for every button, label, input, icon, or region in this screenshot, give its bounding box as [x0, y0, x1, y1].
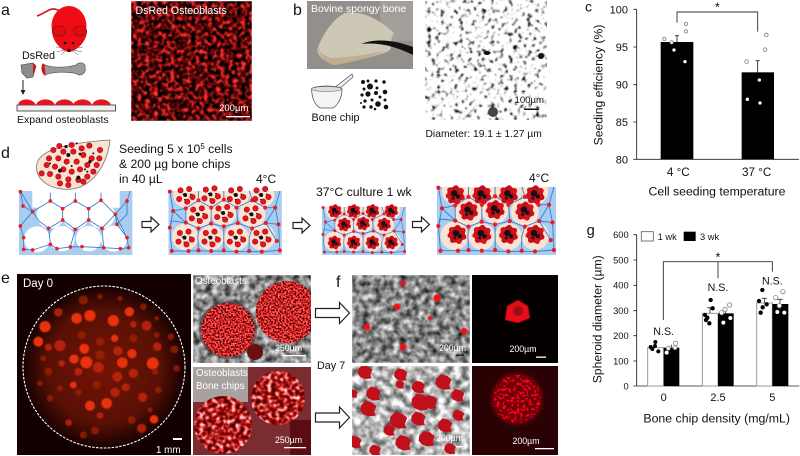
y tick labels — [610, 4, 628, 166]
N.S. labels: N.S. — [708, 282, 728, 294]
y tick labels: 100 — [613, 356, 629, 366]
image: single spheroid bottom — [472, 366, 558, 455]
N.S. labels — [653, 276, 783, 338]
y tick labels: 500 — [613, 255, 629, 265]
label b: b — [293, 2, 302, 19]
arrow 3 — [412, 217, 430, 232]
text: Day 7: Day 7 — [317, 360, 345, 372]
N.S. labels: N.S. — [762, 276, 783, 288]
icon: bone chips — [360, 79, 388, 110]
text: diameter: Diameter: 19.1 ± 1.27 µm — [426, 129, 542, 140]
image: single spheroid top — [472, 275, 558, 363]
image: bone chip micrograph — [425, 0, 547, 120]
significance bracket: * — [716, 250, 721, 264]
image: osteoblasts: 250µm — [275, 343, 302, 353]
icon: expanded osteoblasts on dish — [17, 99, 116, 111]
significance bracket — [663, 250, 772, 320]
bars — [648, 298, 788, 386]
x tick labels: 5 — [769, 392, 775, 404]
bars — [661, 36, 774, 159]
text: seeding conditions: & 200 µg bone chips — [119, 157, 230, 171]
text: seeding conditions: in 40 µL — [119, 172, 163, 186]
icon: droplet of cells and chips — [37, 140, 110, 189]
image: osteoblasts and bone chips: 250µm — [275, 435, 302, 445]
x tick labels — [661, 392, 775, 404]
image: osteoblasts: Osteoblasts — [195, 276, 247, 287]
x tick labels — [667, 166, 771, 179]
arrow: lower to f — [316, 407, 350, 428]
diagram: seeded scaffold — [168, 182, 282, 255]
label f: f — [336, 274, 341, 291]
image: single spheroid bottom: 200µm — [512, 436, 540, 446]
image: DsRed micrograph: DsRed Osteoblasts — [136, 5, 227, 17]
image: day 7 overlay top — [352, 275, 470, 363]
image: whole scaffold day 0: Day 0 — [23, 278, 53, 290]
panel d: seeding schematic — [1, 140, 556, 255]
text: 4°C: 4°C — [256, 172, 276, 186]
image: osteoblasts — [193, 275, 318, 363]
arrow: bone to dish — [20, 80, 26, 95]
diagram: cultured scaffold — [322, 200, 406, 255]
x axis title: Cell seeding temperature — [649, 185, 786, 199]
text: 4°C second: 4°C — [529, 171, 549, 185]
image: osteoblasts and bone chips: Osteoblasts — [196, 368, 248, 379]
y tick labels: 95 — [616, 42, 628, 54]
x tick labels: 4 °C — [667, 166, 690, 179]
x axis title: Bone chip density (mg/mL) — [643, 411, 790, 425]
significance bracket: * — [715, 0, 720, 14]
arrow 1 — [142, 217, 159, 232]
legend: 3 wk — [700, 232, 720, 242]
data points — [663, 22, 768, 63]
panel c: seeding efficiency chart — [585, 0, 799, 199]
data points black — [649, 288, 769, 353]
y tick labels: 85 — [616, 117, 628, 129]
label d: d — [1, 145, 10, 162]
image: day 7 overlay bottom — [348, 365, 470, 456]
label a: a — [1, 2, 10, 19]
panel b: bone chip — [293, 0, 547, 140]
arrow: upper to f — [316, 302, 350, 324]
text: Bone chip: Bone chip — [312, 112, 360, 124]
axes — [633, 9, 799, 159]
arrow 2 — [293, 218, 310, 233]
significance bracket — [677, 0, 758, 32]
image: osteoblasts and bone chips — [193, 367, 311, 455]
x tick labels: 2.5 — [710, 392, 726, 404]
legend — [641, 232, 720, 242]
legend: 1 wk — [658, 232, 677, 242]
image: single spheroid top: 200µm — [509, 344, 537, 354]
panel a: cell source — [1, 1, 252, 126]
y tick labels: 90 — [616, 79, 628, 91]
y axis title: Spheroid diameter (µm) — [591, 255, 605, 383]
text: 37°C culture: 37°C culture 1 wk — [316, 185, 413, 199]
N.S. labels: N.S. — [653, 326, 674, 338]
y tick labels — [613, 230, 629, 391]
axes — [633, 235, 799, 386]
x tick labels: 0 — [661, 392, 667, 404]
y tick labels: 400 — [613, 281, 629, 291]
panel g: spheroid diameter chart — [587, 223, 799, 425]
image: DsRed micrograph — [131, 1, 252, 121]
image: bovine spongy bone photo: Bovine spongy bone — [311, 3, 406, 15]
y tick labels: 80 — [616, 154, 628, 166]
text: seeding conditions: Seeding 5 x 10 — [119, 142, 200, 156]
y tick labels: 300 — [613, 306, 629, 316]
image: day 7 overlay top: 200µm — [439, 343, 466, 353]
data points open — [666, 289, 785, 350]
text: seeding conditions — [119, 142, 233, 186]
image: DsRed micrograph: 200µm — [219, 103, 249, 114]
image: whole scaffold day 0: 1 mm — [156, 445, 180, 456]
y axis title: Seeding efficiency (%) — [592, 25, 606, 145]
panel e: day 0 images — [1, 270, 350, 456]
text: seeding conditions: 5 — [200, 142, 205, 151]
image: bovine spongy bone photo — [307, 1, 413, 69]
icon: mouse — [37, 6, 87, 55]
image: osteoblasts and bone chips: Bone chips — [196, 381, 245, 392]
y tick labels: 100 — [610, 4, 628, 16]
text: DsRed: DsRed — [22, 50, 55, 62]
label e: e — [1, 270, 10, 287]
text: seeding conditions: cells — [205, 142, 233, 156]
icon: bones — [21, 63, 85, 78]
y tick labels: 200 — [613, 331, 629, 341]
y tick labels: 600 — [613, 230, 629, 240]
diagram: empty scaffold — [19, 190, 132, 255]
image: whole scaffold day 0 — [17, 274, 191, 456]
image: day 7 overlay bottom: 200µm — [436, 433, 463, 443]
x tick labels: 37 °C — [742, 166, 771, 179]
diagram: expanded scaffold — [436, 178, 556, 255]
image: bone chip micrograph: 100µm — [514, 95, 544, 106]
y tick labels: 0 — [623, 381, 629, 391]
text: Expand osteoblasts: Expand osteoblasts — [17, 114, 109, 126]
icon: mortar and pestle — [312, 74, 353, 108]
panel f: day 7 images — [317, 274, 558, 456]
label g: g — [587, 223, 595, 239]
